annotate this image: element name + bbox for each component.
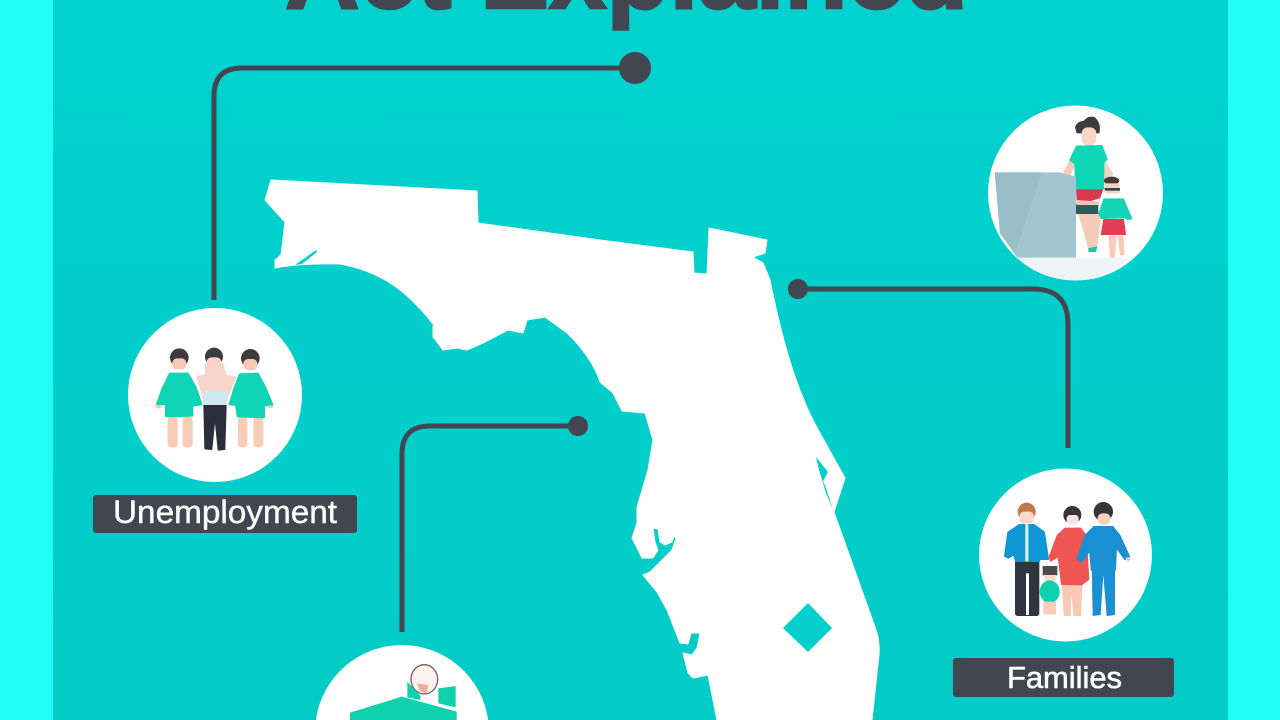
marker: lake diamond — [783, 603, 832, 652]
icon: family group — [979, 468, 1152, 642]
connector: center line with dot — [402, 416, 588, 632]
icon: mother and child at desk — [988, 106, 1163, 280]
label: Unemployment: Unemployment — [113, 494, 337, 530]
connector: right line with dot — [788, 279, 1068, 448]
connector: top left line with dot — [214, 52, 651, 300]
inlet: panhandle bay — [295, 250, 317, 265]
label: Families — [953, 658, 1174, 697]
map: Florida silhouette — [265, 180, 879, 720]
icon: person behind teal box — [316, 645, 488, 720]
label: Families: Families — [1007, 660, 1122, 695]
lagoon: east coast — [816, 457, 833, 510]
icon: unemployed people group — [128, 308, 302, 482]
